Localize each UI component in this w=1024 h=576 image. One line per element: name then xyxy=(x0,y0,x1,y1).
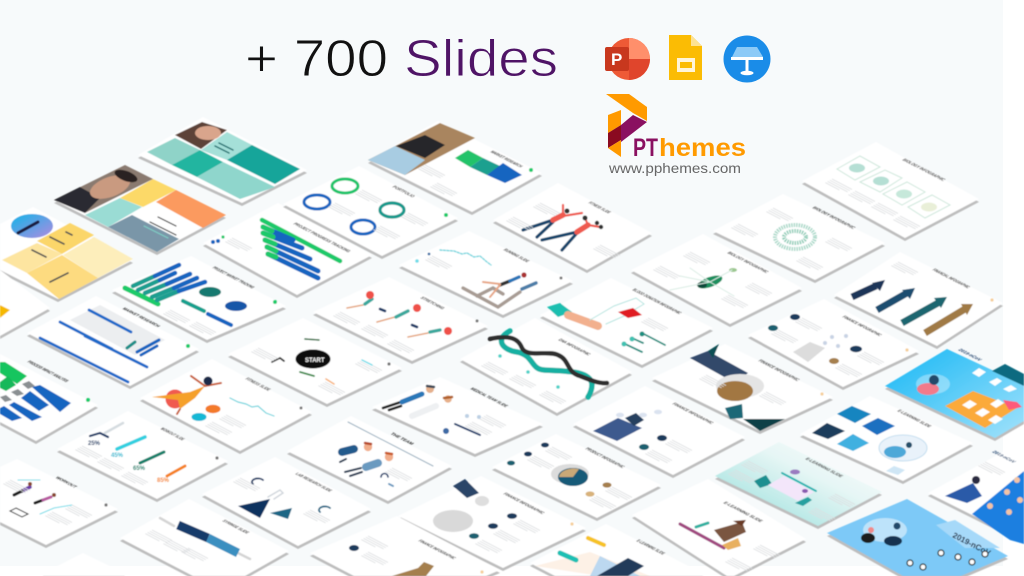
slide: four outlined boxes xyxy=(802,142,979,238)
slide: athletes percentages: 65% xyxy=(133,466,146,472)
slide: two men: THE TEAM xyxy=(388,432,415,446)
slide: doctors xyxy=(372,377,543,454)
slide: market size table xyxy=(27,296,199,386)
icon: PowerPoint: P xyxy=(611,50,622,69)
slide: syringe xyxy=(120,499,289,576)
slide: rising arrows xyxy=(834,252,1003,346)
slide: flask: LAB RESEARCH SLIDE xyxy=(293,472,334,493)
icon: Keynote xyxy=(724,36,770,82)
slide: photo table xyxy=(368,121,542,212)
slide: brain network xyxy=(713,194,885,280)
slide: money bag: FINANCE INFOGRAPHIC xyxy=(756,359,801,382)
slide: DNA: DNA INFOGRAPHIC xyxy=(556,338,592,357)
slide: green blue process xyxy=(0,354,98,441)
slide: 2019 light blue: 2019-nCoV xyxy=(951,531,993,558)
slide: circles portfolio: PORTFOLIO xyxy=(390,185,416,199)
slide: elearning phone xyxy=(530,524,706,576)
icon: Google Slides xyxy=(669,35,702,80)
DNA helix xyxy=(501,331,592,397)
slide: green network: BIOLOGY INFOGRAPHIC xyxy=(725,251,770,274)
slide collage xyxy=(0,117,1024,576)
slide: black circle fitness: START xyxy=(305,358,325,364)
slide: two fitness figures: FITNESS SLIDE xyxy=(586,201,612,215)
slide: flask xyxy=(202,457,371,546)
slide: piggy bank: FINANCE INFOGRAPHIC xyxy=(501,492,546,515)
slide: treadmill: RUNNING SLIDE xyxy=(501,248,531,264)
slide: elearning teal gradient xyxy=(715,442,882,526)
slide: four outlined boxes: BIOLOGY INFOGRAPHIC xyxy=(900,158,947,182)
slide: teal profile xyxy=(138,117,307,203)
slide: athletes percentages: 85% xyxy=(157,478,170,484)
slide: blood donation: BLOOD DONATION INFOGRAPHIC xyxy=(630,288,683,315)
title xyxy=(245,30,558,88)
logo: PThemes: www.pphemes.com xyxy=(608,160,741,176)
slide: market size table: MARKET RESEARCH xyxy=(120,307,161,328)
slide: elearning teal gradient: E-LEARNING SLIDE xyxy=(803,457,845,479)
slide: money bag xyxy=(652,344,833,431)
slide: stair chart xyxy=(203,203,372,295)
logo: PThemes: hemes xyxy=(659,134,746,162)
slide: elearning graduate: E-LEARNING SLIDE xyxy=(721,501,764,524)
slide: syringe: SYRINGE SLIDE xyxy=(220,519,251,535)
title: Slides xyxy=(404,30,558,88)
slide: tie xyxy=(310,516,500,576)
slide: runners xyxy=(0,459,118,545)
slide: brain network: BIOLOGY INFOGRAPHIC xyxy=(810,206,857,230)
slide: partial pie xyxy=(0,270,50,336)
slide: three stretching figures xyxy=(313,277,488,361)
logo: PThemes xyxy=(606,94,746,176)
slide: yellow orange profile xyxy=(54,165,226,252)
slide: green blue process: PROCESS IMPACT ANALYSIS xyxy=(25,360,70,383)
slide: 2019 blue dashboard: 2019-nCoV xyxy=(956,348,983,362)
slide: orange woman fitness: FITNESS SLIDE xyxy=(243,377,272,392)
slide: athletes percentages: 25% xyxy=(88,441,101,447)
slide: wallet: FINANCE INFOGRAPHIC xyxy=(670,402,715,425)
icon: PowerPoint xyxy=(605,38,650,80)
slide: yellow profile xyxy=(0,207,133,299)
slide: 2019 girl and blue panel xyxy=(928,448,1024,544)
slide: coins xyxy=(748,299,919,387)
slide: elearning blue tiles: E-LEARNING SLIDE xyxy=(895,409,933,429)
slide: athletes percentages: WORKOUT SLIDE xyxy=(158,427,186,442)
slide: stair chart: PROJECT PROGRESS TRACKING xyxy=(291,222,352,254)
slide: treadmill xyxy=(399,231,573,315)
slide: two fitness figures xyxy=(493,183,652,270)
slide: three stretching figures: STRETCHING xyxy=(418,296,446,310)
slide: 2019 blue dashboard xyxy=(885,348,1024,438)
slide: athletes percentages xyxy=(57,411,228,499)
slide: rising arrows: FINANCIAL INFOGRAPHIC xyxy=(930,268,971,289)
slide: runners: WORKOUT xyxy=(53,476,78,489)
slide: green network xyxy=(631,234,802,324)
slide: tie: FINANCE INFOGRAPHIC xyxy=(416,539,457,560)
slide: bottom left partial xyxy=(38,553,130,576)
slide: doctors: MEDICAL TEAM SLIDE xyxy=(468,387,510,409)
slide: coins: FINANCE INFOGRAPHIC xyxy=(840,315,883,337)
slide: elearning blue tiles xyxy=(800,396,973,481)
slide: elearning phone: E-LEARNING SLIDE xyxy=(634,539,667,556)
slide: bowl pie xyxy=(492,434,661,518)
slide: bowl pie: PRODUCT INFOGRAPHIC xyxy=(583,447,626,469)
slide: two men xyxy=(287,416,452,501)
title: + 700 xyxy=(245,30,388,88)
slide: blood donation xyxy=(540,278,713,365)
slide: circles portfolio xyxy=(283,166,458,256)
slide: wallet xyxy=(573,386,745,475)
slide: photo table: MARKET RESEARCH xyxy=(488,150,524,169)
slide: piggy bank xyxy=(398,476,586,568)
slide: 2019 light blue xyxy=(827,499,1008,576)
slide: black circle fitness xyxy=(228,318,402,404)
logo: PThemes: PT xyxy=(633,134,658,162)
slide: green blue bar chart: PROJECT MARKET TRACKING xyxy=(210,266,256,290)
slide: 2019 girl and blue panel: 2019-nCoV xyxy=(990,450,1017,464)
slide: DNA xyxy=(460,318,632,413)
slide: elearning graduate xyxy=(632,479,806,576)
stacked bars xyxy=(133,276,179,300)
slide: green blue bar chart xyxy=(112,256,286,340)
slide: orange woman fitness xyxy=(140,359,312,451)
slide: athletes percentages: 45% xyxy=(111,453,124,459)
